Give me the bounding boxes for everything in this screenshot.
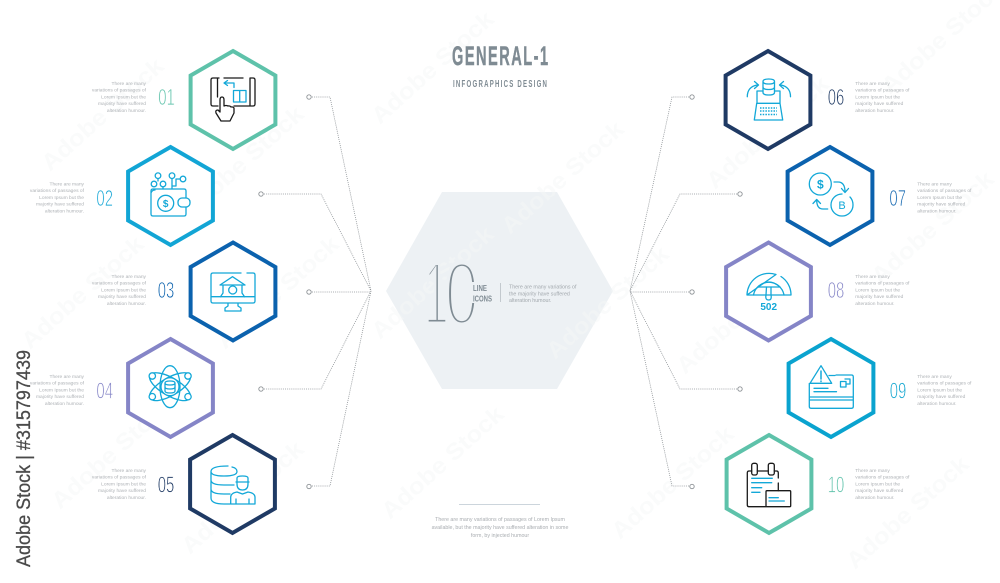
description 03: majority have suffered: [98, 294, 146, 300]
icon: 502 gauge: [747, 273, 791, 313]
icon: tablet swipe: [211, 78, 255, 121]
watermark pattern: Adobe Stock: [496, 116, 629, 239]
subtitle: INFOGRAPHICS DESIGN: [453, 77, 547, 89]
icon: card alert: [809, 366, 853, 408]
hexagon 09: [789, 339, 873, 437]
watermark pattern: Adobe Stock: [541, 241, 674, 364]
number 02: 02: [96, 186, 113, 212]
centre divider: [500, 283, 501, 302]
description 10: Lorem Ipsum but the: [855, 481, 900, 487]
description 03: There are many: [111, 274, 147, 280]
description 05: alteration humour.: [107, 495, 146, 501]
hexagon 08: [726, 242, 811, 340]
description 10: alteration humour.: [855, 495, 894, 501]
description 08: alteration humour.: [855, 301, 894, 307]
description 04: alteration humour.: [45, 401, 84, 407]
number 01: 01: [158, 85, 175, 111]
description 06: alteration humour.: [855, 108, 894, 114]
description 10: variations of passages of: [855, 475, 910, 481]
description 09: variations of passages of: [917, 381, 972, 387]
description 08: There are many: [855, 274, 890, 280]
icon: calendar notes: [747, 463, 791, 507]
right connectors: [630, 95, 742, 489]
watermark pattern: Adobe Stock: [46, 391, 179, 514]
description 04: variations of passages of: [30, 381, 85, 387]
number 10: 10: [828, 472, 844, 498]
icon: database user: [211, 466, 255, 504]
icon: currency exchange: $: [817, 178, 824, 192]
icon: currency exchange: B: [838, 200, 846, 212]
description 02: alteration humour.: [45, 208, 84, 214]
description 03: variations of passages of: [92, 281, 147, 287]
icon: online banking monitor: [211, 273, 255, 311]
number 07: 07: [889, 186, 906, 212]
panel 06: [726, 51, 910, 149]
description 09: Lorem Ipsum but the: [917, 387, 962, 393]
panel 08: [726, 242, 910, 340]
description 01: alteration humour.: [107, 108, 146, 114]
description 07: variations of passages of: [917, 188, 972, 194]
description 01: Lorem Ipsum but the: [101, 94, 146, 100]
centre description: the majority have suffered: [509, 292, 570, 298]
hexagon 04: [128, 339, 213, 437]
panel 10: [727, 435, 910, 533]
hexagon 05: [190, 435, 275, 533]
description 02: There are many: [49, 182, 85, 188]
description 08: variations of passages of: [855, 281, 910, 287]
description 06: variations of passages of: [855, 88, 910, 94]
number 08: 08: [828, 278, 844, 304]
watermark pattern: Adobe Stock: [841, 451, 974, 574]
big number 10: [424, 243, 479, 344]
description 04: majority have suffered: [36, 394, 84, 400]
description 02: majority have suffered: [36, 202, 84, 208]
icon: database typewriter: [747, 79, 790, 120]
big number 10: 1: [424, 243, 449, 343]
description 05: Lorem Ipsum but the: [101, 481, 146, 487]
panel 05: [92, 435, 275, 533]
description 01: There are many: [111, 81, 147, 87]
description 05: majority have suffered: [98, 488, 146, 494]
footer text: There are many variations of passages of Lorem Ipsum: [435, 517, 566, 523]
icon: digital wallet: [151, 173, 190, 216]
description 04: There are many: [49, 374, 85, 380]
description 03: Lorem Ipsum but the: [101, 287, 146, 293]
number 04: 04: [96, 378, 113, 404]
panel 03: [92, 242, 275, 340]
number 03: 03: [158, 278, 174, 304]
hexagon 06: [726, 51, 810, 149]
watermark pattern: Adobe Stock: [176, 436, 309, 559]
description 03: alteration humour.: [107, 301, 146, 307]
panel 04: [30, 339, 213, 437]
watermark pattern: Adobe Stock: [366, 6, 499, 129]
description 07: alteration humour.: [917, 208, 956, 214]
panel 09: [789, 339, 972, 437]
description 07: Lorem Ipsum but the: [917, 195, 962, 201]
hexagon 03: [191, 242, 275, 340]
centre description: alteration humour.: [509, 298, 551, 304]
footer text: available, but the majority have suffered alteration in some: [432, 525, 568, 531]
number 09: 09: [890, 378, 906, 404]
line icons label: [471, 282, 495, 304]
watermark pattern: Adobe Stock: [211, 231, 344, 354]
icon: data science atom: [146, 366, 194, 408]
left connectors: [259, 95, 371, 489]
watermark pattern: Adobe Stock: [376, 401, 509, 524]
description 01: majority have suffered: [98, 101, 146, 107]
line icons label: LINE: [473, 283, 487, 293]
description 07: majority have suffered: [917, 202, 966, 208]
centre content: [424, 243, 577, 344]
number 05: 05: [158, 472, 174, 498]
description 07: There are many: [917, 182, 952, 188]
description 05: There are many: [111, 468, 147, 474]
description 10: majority have suffered: [855, 488, 904, 494]
description 08: majority have suffered: [855, 294, 904, 300]
panel 02: [30, 147, 213, 245]
watermark pattern: Adobe Stock: [16, 231, 149, 354]
description 09: There are many: [917, 374, 952, 380]
description 05: variations of passages of: [92, 475, 147, 481]
description 01: variations of passages of: [92, 88, 147, 94]
hexagon 02: [128, 147, 213, 245]
panel 01: [92, 51, 275, 149]
description 09: alteration humour.: [917, 401, 956, 407]
watermark pattern: Adobe Stock: [366, 221, 499, 344]
description 08: Lorem Ipsum but the: [855, 287, 900, 293]
title: GENERAL-1: [452, 40, 548, 71]
hexagon 01: [191, 51, 275, 149]
big number 10: 0: [445, 244, 479, 344]
description 10: There are many: [855, 468, 890, 474]
icon: 502 gauge: 502: [760, 302, 777, 313]
icon: currency exchange: [809, 173, 853, 216]
watermark pattern: Adobe Stock: [671, 256, 804, 379]
hexagon 10: [727, 435, 811, 533]
description 04: Lorem Ipsum but the: [39, 387, 84, 393]
description 09: majority have suffered: [917, 394, 966, 400]
watermark pattern: Adobe Stock: [176, 101, 309, 224]
description 02: variations of passages of: [30, 188, 85, 194]
centre description: There are many variations of: [509, 284, 577, 290]
footer text: form, by injected humour: [471, 533, 529, 539]
panel 07: [788, 147, 972, 245]
description 06: Lorem Ipsum but the: [855, 94, 900, 100]
stock id side label: Adobe Stock | #315797439: [14, 350, 35, 567]
central hexagon: [386, 192, 613, 389]
description 06: There are many: [855, 81, 890, 87]
watermark pattern: Adobe Stock: [701, 71, 834, 194]
hexagon 07: [788, 147, 872, 245]
watermark pattern: Adobe Stock: [606, 421, 739, 544]
line icons label: ICONS: [473, 294, 492, 304]
watermark pattern: Adobe Stock: [866, 166, 999, 289]
description 02: Lorem Ipsum but the: [39, 195, 84, 201]
icon: digital wallet: $: [163, 199, 169, 210]
watermark pattern: Adobe Stock: [36, 53, 169, 176]
number 06: 06: [828, 85, 844, 111]
description 06: majority have suffered: [855, 101, 904, 107]
footer rule: [459, 504, 540, 505]
